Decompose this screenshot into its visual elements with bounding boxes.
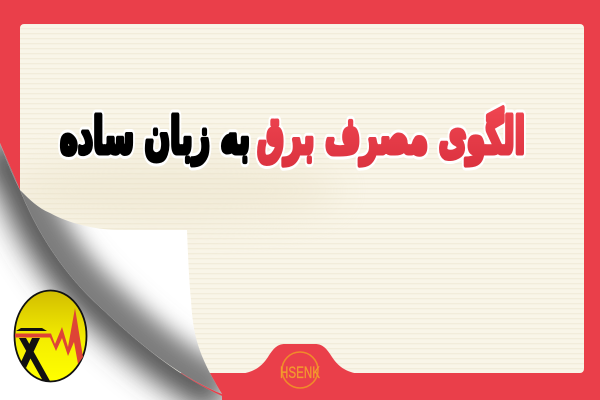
- icon: electricity company logo: [14, 290, 86, 382]
- page curl: folded flap: [0, 130, 225, 400]
- title: white halo: به زبان ساده: [60, 107, 250, 165]
- logo: pylon: [16, 328, 50, 381]
- logo: yellow disc: [14, 290, 86, 382]
- icon: HSENK emblem: HSENK: [280, 363, 320, 382]
- title: [60, 107, 525, 166]
- panel: bottom red tab: [240, 344, 360, 374]
- title: black part: به زبان ساده: [60, 107, 250, 165]
- logo: red pulse line: [15, 308, 83, 364]
- icon: HSENK emblem: [280, 352, 320, 388]
- title: white halo: [60, 107, 525, 166]
- page curl: revealed background: [0, 130, 225, 400]
